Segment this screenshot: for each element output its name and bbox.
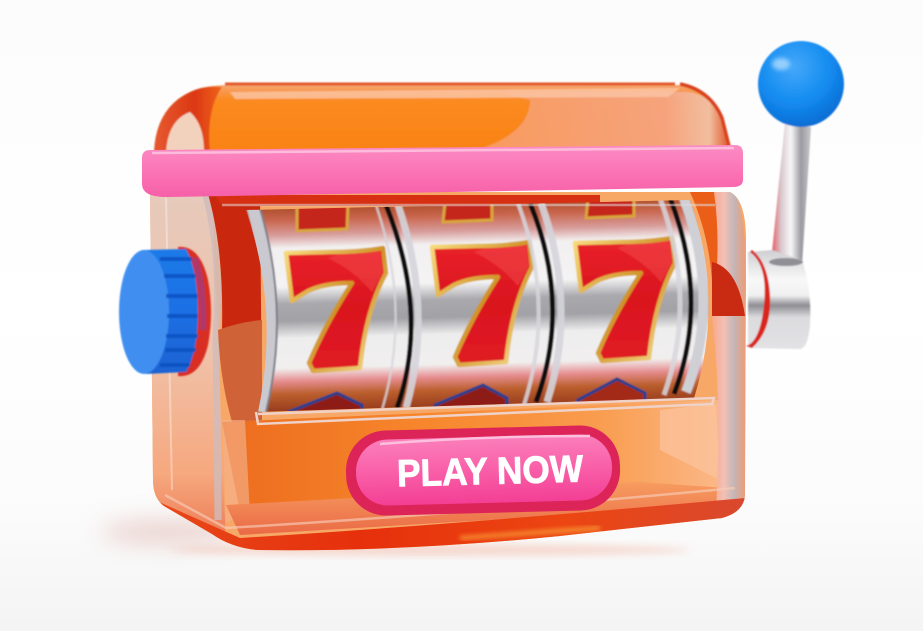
window frame — [222, 205, 715, 424]
reel 3 upper symbol — [586, 198, 634, 218]
right glass side — [712, 192, 746, 510]
lever ball — [758, 41, 844, 127]
reel 3 lower symbol — [576, 376, 648, 402]
red zone behind reels — [208, 196, 262, 329]
lever base — [746, 250, 810, 349]
lower interior — [222, 400, 722, 512]
right red zone — [690, 192, 718, 282]
button label: PLAY NOW — [397, 449, 584, 495]
reel 2 lower symbol — [432, 382, 510, 406]
floor shadow — [100, 520, 690, 556]
machine body — [150, 190, 750, 560]
floor — [226, 482, 738, 535]
reel 1 upper symbol — [297, 205, 348, 231]
reels — [246, 200, 709, 412]
reel rings — [252, 198, 704, 412]
play now button — [345, 424, 621, 517]
pink band — [142, 145, 743, 197]
lever rod — [771, 122, 811, 266]
reel 1 lower symbol — [286, 390, 365, 412]
left pillar — [205, 192, 218, 520]
seven 3 — [575, 238, 675, 361]
bottom rim — [160, 498, 745, 550]
glass dome — [154, 84, 730, 152]
lever — [746, 41, 844, 349]
reel 2 upper symbol — [443, 202, 492, 222]
knob collar — [178, 247, 211, 376]
left glass side — [150, 190, 226, 545]
seven 1 — [286, 248, 386, 371]
seven 2 — [432, 242, 532, 365]
left blue knob — [119, 247, 211, 376]
